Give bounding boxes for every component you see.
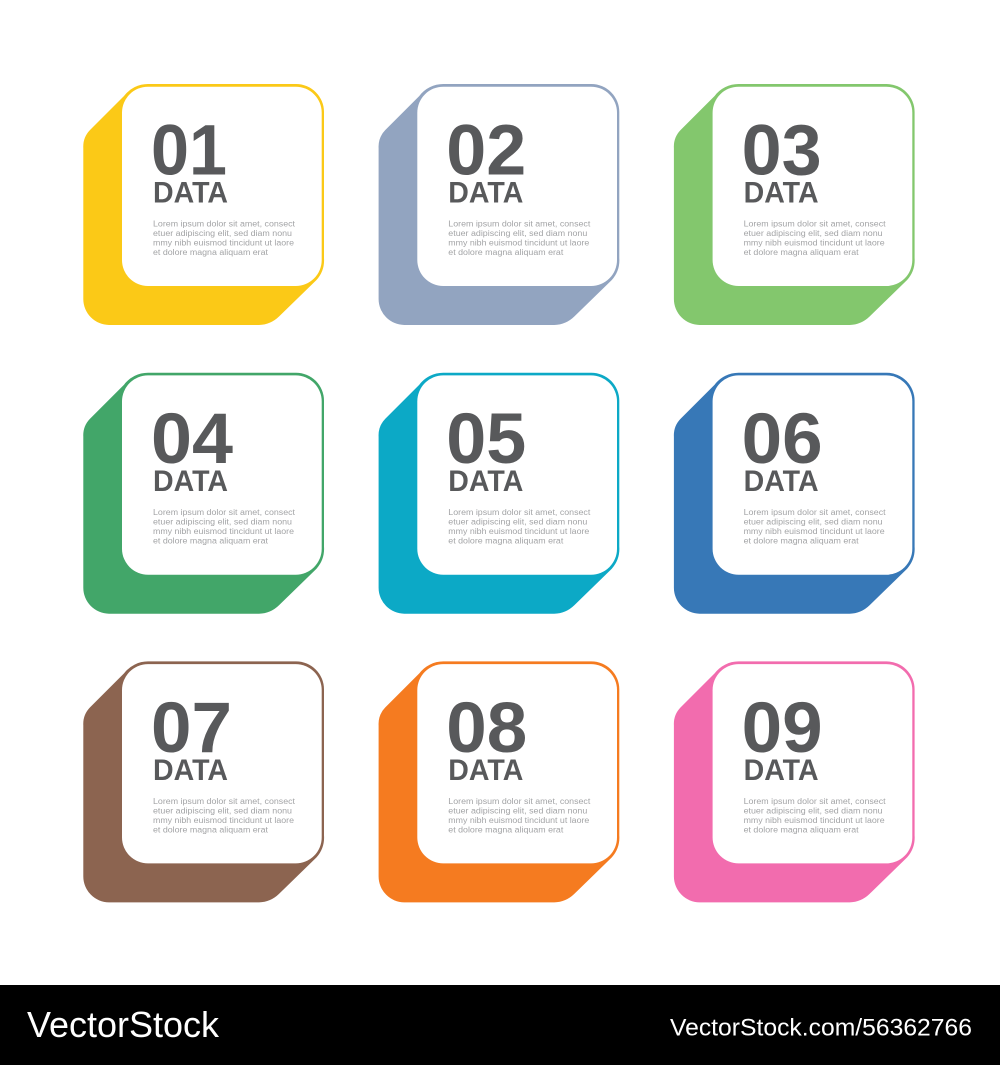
body text 02 bbox=[448, 220, 591, 257]
body text 04: Lorem ipsum dolor sit amet, consect bbox=[153, 508, 296, 517]
body text 09 bbox=[744, 797, 886, 834]
body text 07: et dolore magna aliquam erat bbox=[153, 825, 269, 834]
footer bar bbox=[0, 985, 1000, 1065]
card 02 bbox=[379, 84, 619, 325]
label 08: DATA bbox=[448, 754, 523, 787]
body text 06: etuer adipiscing elit, sed diam nonu bbox=[744, 518, 883, 527]
body text 09: etuer adipiscing elit, sed diam nonu bbox=[744, 806, 883, 815]
number 03: 03 bbox=[742, 112, 822, 190]
body text 02: mmy nibh euismod tincidunt ut laore bbox=[448, 238, 590, 248]
card 09 bbox=[674, 661, 915, 902]
body text 03: etuer adipiscing elit, sed diam nonu bbox=[744, 229, 883, 238]
label 04: DATA bbox=[153, 465, 228, 498]
label 07: DATA bbox=[153, 754, 228, 787]
body text 01: et dolore magna aliquam erat bbox=[153, 248, 269, 257]
body text 02: Lorem ipsum dolor sit amet, consect bbox=[448, 220, 591, 228]
body text 05: etuer adipiscing elit, sed diam nonu bbox=[448, 518, 587, 527]
body text 08: etuer adipiscing elit, sed diam nonu bbox=[448, 806, 587, 815]
number 05: 05 bbox=[446, 400, 526, 479]
body text 07: mmy nibh euismod tincidunt ut laore bbox=[153, 816, 295, 825]
body text 09: Lorem ipsum dolor sit amet, consect bbox=[744, 797, 886, 806]
body text 06 bbox=[744, 508, 886, 546]
number 06: 06 bbox=[742, 400, 823, 479]
number 04: 04 bbox=[151, 400, 234, 479]
body text 01: etuer adipiscing elit, sed diam nonu bbox=[153, 229, 292, 238]
body text 05: Lorem ipsum dolor sit amet, consect bbox=[448, 508, 591, 517]
body text 04: etuer adipiscing elit, sed diam nonu bbox=[153, 518, 292, 527]
card 04 bbox=[83, 373, 324, 614]
body text 08: mmy nibh euismod tincidunt ut laore bbox=[448, 816, 590, 825]
number 08: 08 bbox=[446, 689, 527, 768]
body text 06: Lorem ipsum dolor sit amet, consect bbox=[744, 508, 886, 517]
body text 04: et dolore magna aliquam erat bbox=[153, 537, 269, 546]
label 09: DATA bbox=[744, 754, 819, 787]
card 05 bbox=[379, 373, 619, 614]
body text 05: mmy nibh euismod tincidunt ut laore bbox=[448, 527, 590, 536]
label 01: DATA bbox=[153, 176, 228, 210]
body text 04 bbox=[153, 508, 296, 546]
body text 08: Lorem ipsum dolor sit amet, consect bbox=[448, 797, 591, 806]
body text 02: et dolore magna aliquam erat bbox=[448, 248, 564, 257]
body text 01: mmy nibh euismod tincidunt ut laore bbox=[153, 238, 295, 248]
label 03: DATA bbox=[744, 176, 819, 210]
number 01: 01 bbox=[151, 112, 227, 190]
body text 08: et dolore magna aliquam erat bbox=[448, 825, 564, 834]
body text 08 bbox=[448, 797, 591, 834]
number 07: 07 bbox=[151, 689, 232, 768]
card 06 bbox=[674, 373, 915, 614]
body text 01 bbox=[153, 220, 296, 257]
number 09: 09 bbox=[742, 689, 823, 768]
body text 03 bbox=[744, 220, 886, 257]
body text 06: mmy nibh euismod tincidunt ut laore bbox=[744, 527, 885, 536]
label 02: DATA bbox=[448, 176, 523, 210]
body text 07: etuer adipiscing elit, sed diam nonu bbox=[153, 806, 292, 815]
footer logo: VectorStock bbox=[27, 1004, 220, 1045]
card 01 bbox=[83, 84, 324, 325]
body text 07 bbox=[153, 797, 296, 834]
body text 09: et dolore magna aliquam erat bbox=[744, 825, 859, 834]
body text 01: Lorem ipsum dolor sit amet, consect bbox=[153, 220, 296, 228]
footer image id: VectorStock.com/56362766 bbox=[670, 1014, 972, 1042]
body text 07: Lorem ipsum dolor sit amet, consect bbox=[153, 797, 296, 806]
label 05: DATA bbox=[448, 465, 523, 498]
label 06: DATA bbox=[744, 465, 819, 498]
body text 02: etuer adipiscing elit, sed diam nonu bbox=[448, 229, 587, 238]
body text 04: mmy nibh euismod tincidunt ut laore bbox=[153, 527, 295, 536]
card 03 bbox=[674, 84, 915, 325]
card 08 bbox=[379, 661, 619, 902]
body text 06: et dolore magna aliquam erat bbox=[744, 537, 859, 546]
body text 03: et dolore magna aliquam erat bbox=[744, 248, 859, 257]
body text 03: mmy nibh euismod tincidunt ut laore bbox=[744, 238, 885, 248]
body text 05 bbox=[448, 508, 591, 546]
body text 05: et dolore magna aliquam erat bbox=[448, 537, 564, 546]
body text 03: Lorem ipsum dolor sit amet, consect bbox=[744, 220, 886, 228]
number 02: 02 bbox=[446, 112, 526, 190]
body text 09: mmy nibh euismod tincidunt ut laore bbox=[744, 816, 885, 825]
card 07 bbox=[83, 661, 324, 902]
